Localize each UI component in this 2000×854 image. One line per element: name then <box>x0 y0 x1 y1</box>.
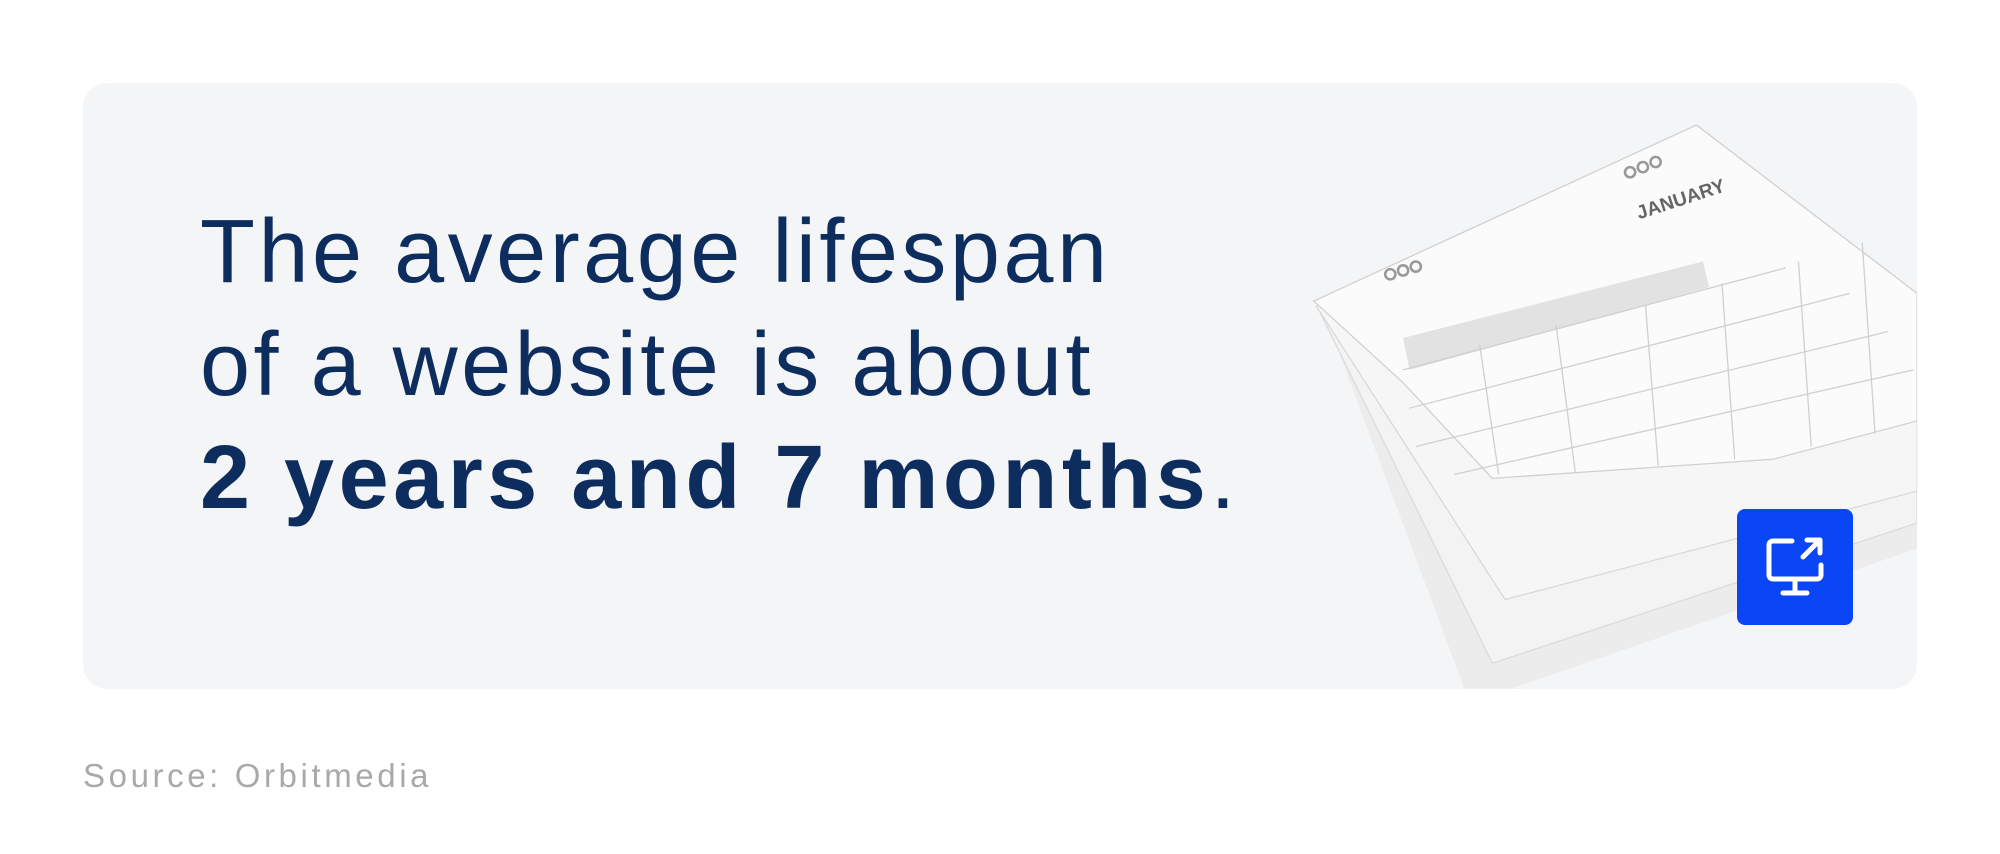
icon: monitor with arrow <box>1737 509 1853 625</box>
title text <box>200 202 1239 528</box>
title text: of a website is about <box>200 315 1094 415</box>
calendar illustration: JANUARY <box>1634 176 1728 224</box>
source note: Source: Orbitmedia <box>83 757 432 794</box>
panel: background <box>83 83 1917 689</box>
title text: The average lifespan <box>200 202 1111 302</box>
calendar illustration <box>1312 124 1918 688</box>
title text: 2 years and 7 months. <box>200 428 1239 528</box>
